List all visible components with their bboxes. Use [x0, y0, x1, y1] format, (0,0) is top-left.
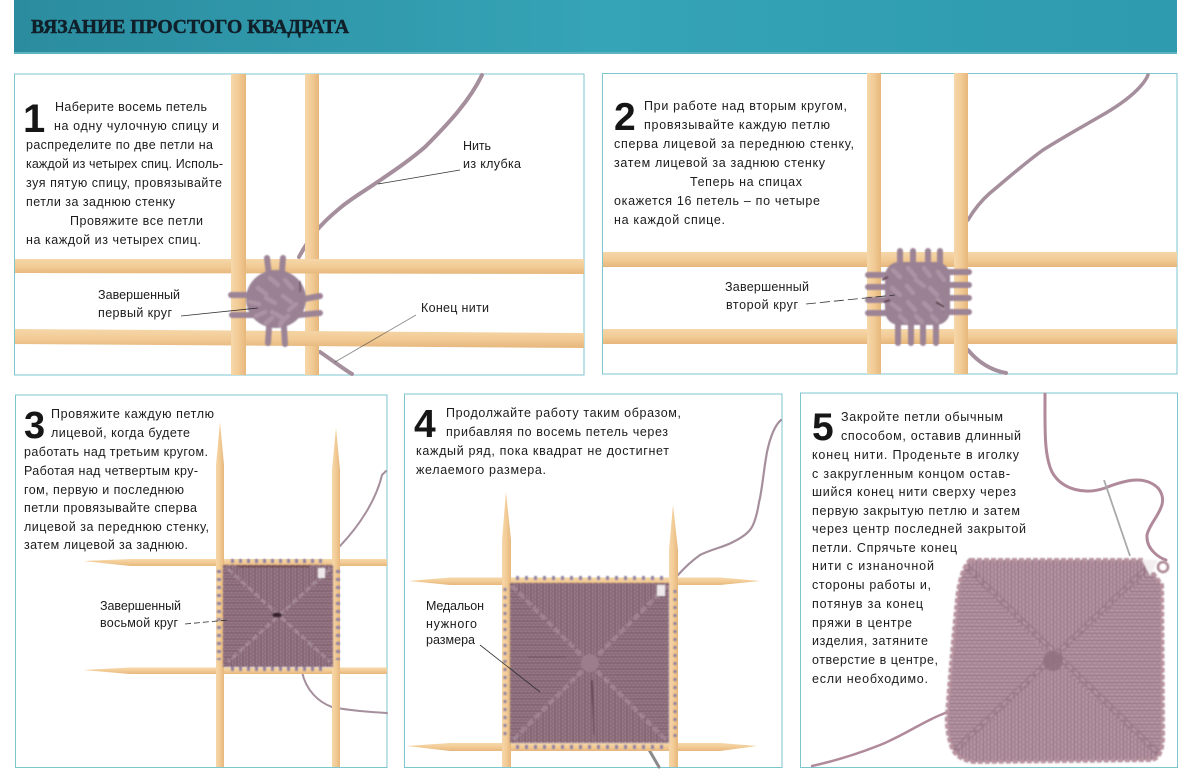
callout: eighth round: Завершенный [100, 599, 181, 613]
title: ВЯЗАНИЕ ПРОСТОГО КВАДРАТА [31, 16, 350, 38]
instructions text: с закругленным концом остав- [812, 467, 1010, 481]
instructions text: сперва лицевой за переднюю стенку, [614, 137, 854, 151]
instructions text: окажется 16 петель – по четыре [614, 194, 820, 208]
yarn [340, 471, 386, 546]
instructions text [26, 100, 223, 247]
instructions text: зуя пятую спицу, провязывайте [26, 176, 222, 190]
instructions text: распределите по две петли на [26, 138, 213, 152]
callout: yarn end: Конец нити [421, 301, 489, 315]
panel: step 2 [602, 73, 1177, 374]
needles [15, 74, 584, 375]
instructions text: каждый ряд, пока квадрат не достигнет [416, 444, 669, 458]
step number 2: 2 [614, 96, 636, 139]
instructions text: на одну чулочную спицу и [54, 119, 219, 133]
yarn tail [320, 352, 352, 374]
callout: first round: Завершенный [98, 288, 180, 302]
instructions text: на каждой спице. [614, 213, 725, 227]
yarn from ball [968, 75, 1148, 220]
callout: medallion: размера [426, 633, 475, 647]
instructions text: стороны работы и, [812, 578, 931, 592]
instructions text: лицевой, когда будете [51, 426, 190, 440]
instructions text: отверстие в центре, [812, 653, 938, 667]
needles [407, 492, 760, 767]
instructions text: Наберите восемь петель [55, 100, 207, 114]
instructions text: затем лицевой за заднюю стенку [614, 156, 826, 170]
instructions text: на каждой из четырех спиц. [26, 233, 201, 247]
instructions text: работать над третьим кругом. [24, 445, 208, 459]
instructions text: петли за заднюю стенку [26, 195, 176, 209]
panel: step 4 [404, 394, 782, 768]
panel: step 1 [14, 74, 584, 375]
instructions text: Закройте петли обычным [841, 410, 1003, 424]
callout: yarn end [335, 301, 489, 362]
needles [83, 422, 387, 767]
instructions text: затем лицевой за заднюю. [24, 538, 188, 552]
callout: medallion: нужного [426, 617, 477, 631]
panel: step 3 [16, 395, 387, 768]
header banner [14, 0, 1177, 54]
callout: second round: Завершенный [725, 280, 809, 294]
callout: medallion: Медальон [426, 599, 484, 613]
step number 5: 5 [812, 406, 834, 449]
callout: eighth round: восьмой круг [100, 616, 178, 630]
instructions text: нити с изнаночной [812, 559, 934, 573]
instructions text: изделия, затяните [812, 634, 928, 648]
instructions text: Провяжите каждую петлю [51, 407, 214, 421]
instructions text: гом, первую и последнюю [24, 483, 184, 497]
step number 3: 3 [24, 405, 45, 447]
instructions text: способом, оставив длинный [841, 429, 1021, 443]
instructions text: желаемого размера. [416, 463, 546, 477]
instructions text: петли провязывайте сперва [24, 501, 197, 515]
instructions text: прибавляя по восемь петель через [446, 425, 668, 439]
yarn [1045, 394, 1166, 560]
instructions text [24, 407, 214, 552]
instructions text: Продолжайте работу таким образом, [446, 406, 681, 420]
knitted square, full size [505, 578, 675, 747]
instructions text: При работе над вторым кругом, [644, 99, 847, 113]
yarn tail [968, 350, 1006, 373]
instructions text: потянув за конец [812, 597, 923, 611]
instructions text: шийся конец нити сверху через [812, 485, 1016, 499]
callout: yarn from ball: из клубка [463, 157, 521, 171]
instructions text: провязывайте каждую петлю [644, 118, 830, 132]
instructions text: конец нити. Проденьте в иголку [812, 448, 1020, 462]
callout: second round: второй круг [726, 298, 798, 312]
instructions text [614, 99, 854, 227]
instructions text: первую закрытую петлю и затем [812, 504, 1020, 518]
callout: first round [98, 288, 258, 320]
callout: yarn from ball: Нить [463, 139, 491, 153]
callout: second round [725, 280, 895, 312]
callout: eighth round [100, 599, 228, 630]
callout: yarn from ball [378, 139, 521, 184]
step number 1: 1 [23, 97, 45, 141]
instructions text: Провяжите все петли [70, 214, 203, 228]
instructions text: Теперь на спицах [690, 175, 803, 189]
instructions text: Работая над четвертым кру- [24, 464, 198, 478]
instructions text [416, 406, 681, 477]
knitted square, eight rounds [219, 561, 338, 669]
callout: first round: первый круг [98, 306, 172, 320]
instructions text: через центр последней закрытой [812, 522, 1026, 536]
yarn from ball [299, 75, 482, 257]
instructions text: петли. Спрячьте конец [812, 541, 957, 555]
step number 4: 4 [414, 403, 436, 446]
instructions text: пряжи в центре [812, 616, 912, 630]
callout: medallion [426, 599, 540, 692]
panel: step 5 [800, 393, 1178, 768]
instructions text: каждой из четырех спиц. Исполь- [26, 157, 223, 171]
yarn [678, 420, 781, 575]
instructions text: лицевой за переднюю стенку, [24, 520, 209, 534]
instructions text [812, 410, 1026, 686]
needles [603, 73, 1177, 374]
instructions text: если необходимо. [812, 672, 928, 686]
needle [1104, 480, 1130, 556]
knitted first round [231, 258, 320, 344]
knitted second round [868, 251, 969, 343]
finished square [940, 555, 1170, 767]
